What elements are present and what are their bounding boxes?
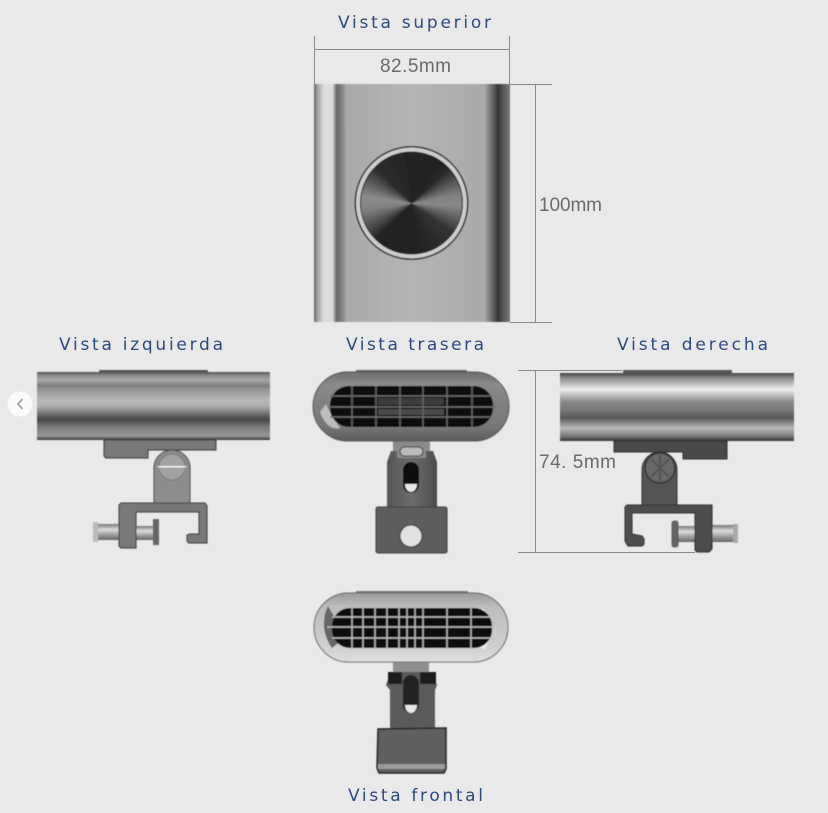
dimension: height 100mm: 100mm <box>539 195 602 216</box>
right view product <box>560 370 794 552</box>
vent grille <box>328 386 496 427</box>
top view product <box>314 84 510 322</box>
heading: Vista frontal: Vista frontal <box>348 786 483 806</box>
rear view product <box>313 370 509 553</box>
heading: Vista superior: Vista superior <box>338 13 491 33</box>
dimension: width 82.5mm: 82.5mm <box>380 56 451 77</box>
dimension: depth 74.5mm: 74. 5mm <box>539 452 616 473</box>
dimension: depth 74.5mm <box>518 370 695 552</box>
dimension: width 82.5mm <box>314 36 510 84</box>
dimension: height 100mm <box>510 84 602 322</box>
icon: top dial <box>354 146 468 260</box>
button: carousel previous <box>8 392 32 416</box>
heading: Vista izquierda: Vista izquierda <box>59 335 223 355</box>
left view product <box>37 370 270 548</box>
heading: Vista trasera: Vista trasera <box>346 335 484 355</box>
front view product <box>314 591 508 773</box>
vent grille <box>327 608 494 648</box>
heading: Vista derecha: Vista derecha <box>617 335 768 355</box>
